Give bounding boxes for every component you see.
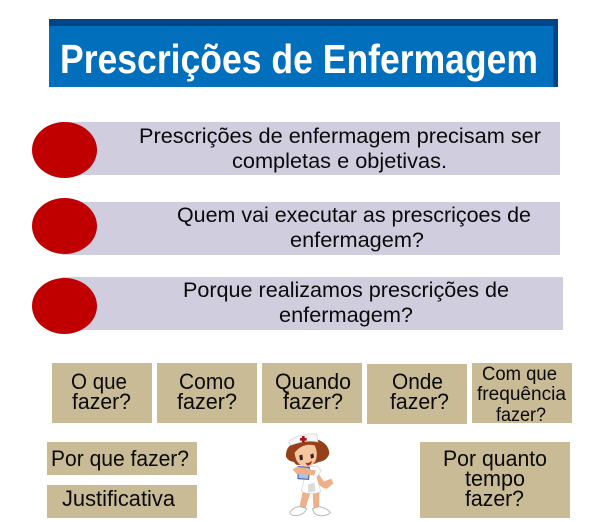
box: por quanto tempo fazer: tempo [465, 466, 525, 491]
statement 1 text: completas e objetivas. [232, 149, 447, 173]
box: com que frequência fazer: frequência [477, 384, 566, 405]
eyes and mouth [299, 453, 314, 460]
box: quando fazer: fazer? [283, 389, 343, 414]
icon: nurse illustration [286, 434, 333, 516]
box: com que frequência fazer: fazer? [496, 405, 546, 426]
box: por quanto tempo fazer: Por quanto [443, 446, 547, 471]
dress [301, 466, 321, 494]
clipboard [298, 467, 309, 479]
right arm [313, 469, 333, 489]
cap cross [300, 436, 307, 443]
box: por quanto tempo fazer [420, 442, 570, 518]
bullet 2 [32, 198, 97, 254]
box: como fazer: fazer? [177, 389, 237, 414]
box: justificativa: Justificativa [62, 486, 176, 511]
left arm [293, 467, 316, 475]
face [295, 445, 317, 467]
box: o que fazer: O que [71, 369, 127, 394]
shoes [290, 507, 330, 516]
box: quando fazer: Quando [275, 369, 351, 394]
panel: statement 1 [32, 122, 560, 178]
statement 2 text: enfermagem? [290, 228, 424, 252]
box: onde fazer: Onde [392, 369, 443, 394]
statement 2 text: Quem vai executar as prescriçoes de [177, 203, 531, 227]
panel: statement 2 [32, 198, 560, 255]
cap [289, 434, 318, 445]
statement 1 text: Prescrições de enfermagem precisam ser [139, 124, 541, 148]
statement 1 text [139, 124, 541, 173]
box: justificativa [47, 485, 197, 518]
title text: Prescrições de Enfermagem [60, 36, 538, 82]
box: com que frequência fazer: Com que [482, 364, 557, 385]
statement 3 text: Porque realizamos prescrições de [183, 278, 509, 302]
box: onde fazer: fazer? [390, 389, 449, 414]
panel: statement 3 [32, 277, 563, 334]
box: onde fazer [367, 364, 467, 424]
dress shadow [308, 483, 315, 493]
box: o que fazer [52, 363, 152, 423]
box: como fazer [157, 363, 257, 423]
hair [286, 439, 329, 465]
bullet 3 [32, 278, 97, 334]
box: com que frequência fazer [472, 363, 572, 426]
box: o que fazer: fazer? [72, 389, 131, 414]
statement 3 text: enfermagem? [279, 303, 413, 327]
box: por que fazer: Por que fazer? [51, 446, 189, 471]
bullet 1 [32, 122, 97, 178]
legs [299, 488, 319, 509]
statement 3 text [183, 278, 509, 327]
box: por quanto tempo fazer: fazer? [465, 486, 524, 511]
title banner [49, 19, 558, 87]
box: quando fazer [262, 363, 362, 423]
statement 2 text [177, 203, 531, 252]
box: como fazer: Como [179, 369, 235, 394]
